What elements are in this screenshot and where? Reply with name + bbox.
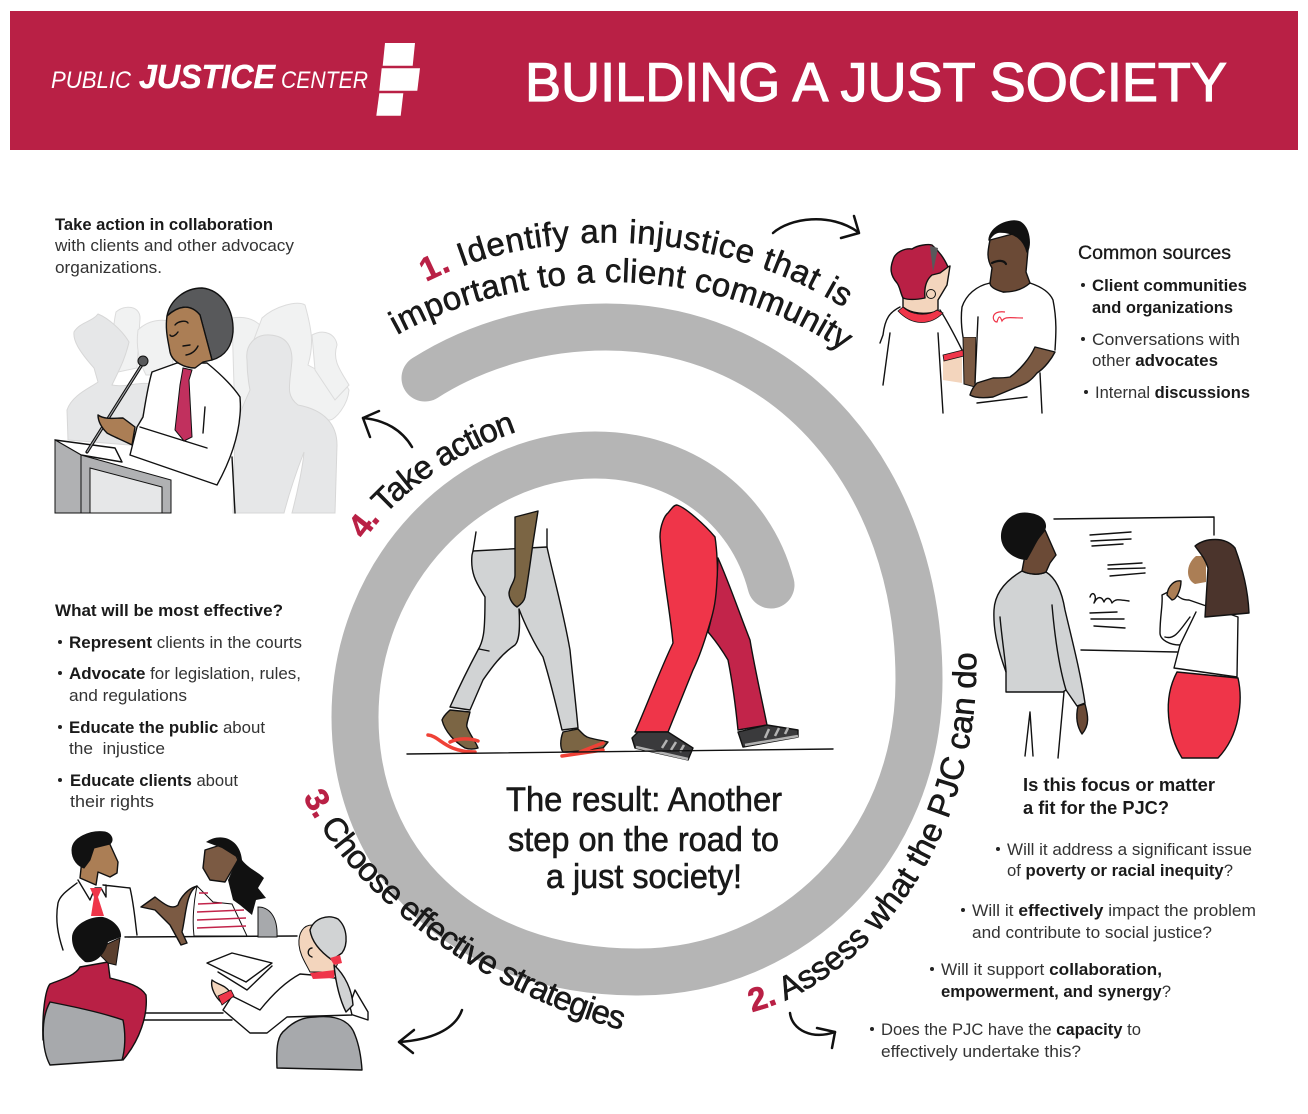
microphone	[87, 356, 148, 452]
illustration: people at a table	[43, 832, 368, 1070]
text: assessment questions: Will it support collaboration,	[941, 961, 1162, 979]
illustration: two people at a whiteboard	[994, 512, 1249, 758]
tie	[175, 368, 192, 441]
text: assessment questions: Does the PJC have the capacity to	[881, 1021, 1141, 1039]
step 1 heading: 1. Identify an injustice that is	[420, 218, 850, 306]
text: is this focus a fit: a fit for the PJC?	[1023, 797, 1169, 818]
brown arm	[509, 511, 538, 607]
text: assessment questions	[870, 841, 1256, 1061]
woman hand	[1167, 581, 1181, 600]
logo: JUSTICE	[139, 58, 276, 95]
text: common sources: and organizations	[1092, 299, 1233, 317]
text: common sources	[1078, 243, 1250, 402]
text: what will be most effective: Educate clients about	[70, 772, 238, 790]
text: common sources: Common sources	[1078, 243, 1231, 264]
text: assessment questions: empowerment, and synergy?	[941, 983, 1171, 1001]
logo: CENTER	[281, 67, 368, 94]
woman hair	[891, 245, 948, 300]
text: common sources: Internal discussions	[1095, 384, 1250, 402]
text: common sources: Conversations with	[1092, 331, 1240, 349]
arrow: to step 2 list	[790, 1013, 835, 1048]
seated man chair	[43, 1002, 125, 1065]
writer shirt	[223, 974, 352, 1033]
writer chair	[277, 1017, 362, 1070]
logo: PUBLIC	[51, 67, 132, 94]
text: take action in collaboration: Take action in collaboration	[55, 216, 273, 234]
brown feet	[442, 710, 608, 752]
header banner	[10, 11, 1298, 150]
woman chair	[258, 907, 277, 937]
text: assessment questions: of poverty or racial inequity?	[1007, 862, 1233, 880]
arrow: to step 3 illustration	[399, 1010, 462, 1053]
illustration: speaker at podium with crowd	[55, 288, 349, 513]
logo	[51, 43, 420, 116]
text: what will be most effective: Educate the public about	[69, 719, 265, 737]
man head	[988, 232, 1030, 292]
text: what will be most effective: What will be most effective?	[55, 602, 283, 620]
man trousers	[1025, 692, 1064, 758]
shoes	[632, 725, 798, 760]
woman shirt	[883, 307, 962, 413]
text: assessment questions: and contribute to social justice?	[972, 924, 1212, 942]
woman skirt	[1168, 672, 1240, 758]
man arm behind	[963, 337, 976, 387]
arrow: to step 4 illustration	[363, 411, 412, 447]
crowd	[113, 303, 349, 420]
writer hand	[212, 980, 230, 1003]
text: take action in collaboration: with clients and other advocacy	[54, 237, 295, 255]
text: what will be most effective	[55, 602, 302, 811]
table lines	[125, 936, 297, 1020]
woman dress	[193, 886, 247, 936]
centre result text: The result: Another	[506, 781, 782, 819]
step 1 heading line 2: important to a client community	[387, 258, 853, 350]
man head	[80, 840, 118, 885]
text: what will be most effective: the injustice	[69, 740, 165, 758]
arrow: to step 2 illustration	[773, 216, 859, 238]
step 2 heading: 2. Assess what the PJC can do	[748, 654, 977, 1012]
neck and arm skin	[903, 266, 950, 313]
whiteboard	[1054, 517, 1214, 652]
shirt logo	[993, 312, 1023, 322]
man sweater	[994, 571, 1085, 706]
text: is this focus a fit: Is this focus or matter	[1023, 774, 1215, 795]
woman hair	[1195, 540, 1249, 617]
man tie	[90, 888, 104, 916]
dark back leg	[708, 558, 767, 730]
step 3 heading: 3. Choose effective strategies	[305, 789, 624, 1029]
papers	[207, 953, 272, 982]
red front leg	[635, 505, 717, 732]
man hand	[1077, 704, 1088, 734]
hair	[167, 288, 233, 360]
ponytail	[334, 965, 353, 1012]
seated man head	[100, 938, 120, 965]
shirt	[130, 363, 240, 485]
walking legs illustration	[407, 505, 833, 760]
illustration: two people in conversation	[880, 221, 1057, 413]
man shirt	[962, 283, 1057, 413]
man arm	[970, 347, 1055, 398]
man standing shirt	[58, 883, 137, 950]
writer head	[299, 925, 340, 972]
text: common sources: other advocates	[1092, 352, 1218, 370]
table corner	[347, 990, 368, 1020]
text: assessment questions: effectively undertake this?	[881, 1043, 1081, 1061]
hand	[98, 415, 135, 445]
face	[166, 307, 212, 368]
text: common sources: Client communities	[1092, 277, 1247, 295]
text: what will be most effective: Represent clients in the courts	[69, 634, 302, 652]
collar and hair tie	[310, 955, 342, 979]
whiteboard writing	[1090, 532, 1145, 628]
podium	[55, 440, 122, 462]
woman blouse	[1160, 590, 1238, 677]
ground line	[407, 749, 833, 754]
woman face	[1188, 556, 1206, 584]
gray legs	[450, 547, 578, 730]
text: take action in collaboration	[54, 216, 295, 277]
text: what will be most effective: and regulations	[69, 687, 187, 705]
centre result text: a just society!	[546, 858, 742, 896]
spiral road	[355, 327, 919, 972]
red flip flops	[428, 735, 603, 756]
text: what will be most effective: their rights	[70, 793, 154, 811]
collar	[898, 307, 943, 323]
man head	[1022, 530, 1056, 574]
text: assessment questions: Will it effectively impact the problem	[972, 902, 1256, 920]
title: BUILDING A JUST SOCIETY	[525, 51, 1227, 113]
woman hair	[206, 837, 266, 915]
step 4 heading: 4. Take action	[352, 416, 515, 538]
centre result text: step on the road to	[508, 821, 779, 859]
woman head	[203, 842, 238, 882]
centre result text	[506, 781, 782, 896]
seated man red shirt	[43, 962, 146, 1060]
woman arm	[141, 886, 197, 945]
text: take action in collaboration: organizations.	[55, 259, 162, 277]
text: assessment questions: Will it address a significant issue	[1007, 841, 1252, 859]
text: is this focus a fit	[1023, 774, 1215, 818]
text: what will be most effective: Advocate for legislation, rules,	[69, 665, 301, 683]
